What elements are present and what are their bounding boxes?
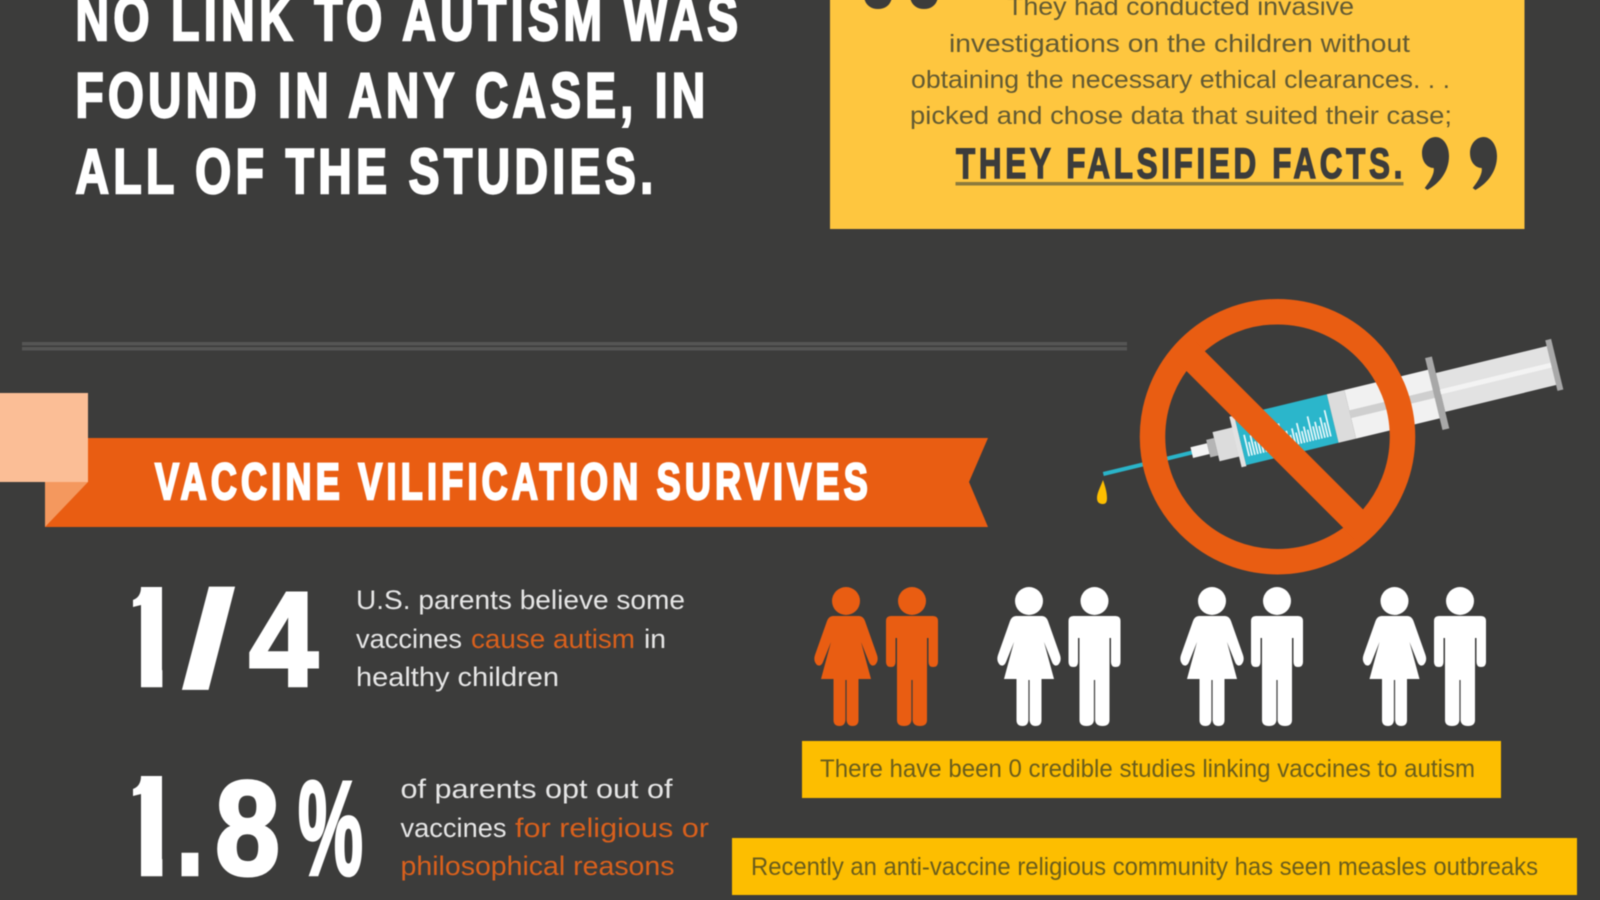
couple 3 (1180, 587, 1303, 726)
description (400, 774, 709, 881)
callout: zero credible studies: There have been 0 credible studies linking vaccines to autism (820, 755, 1475, 783)
quote text: investigations on the children without (949, 30, 1410, 58)
quote text: obtaining the necessary ethical clearances. . . (911, 66, 1450, 94)
icon: closing quotation marks (1422, 137, 1497, 190)
big number: 1 (139, 754, 163, 900)
callout: zero credible studies (802, 741, 1501, 798)
syringe (1095, 328, 1566, 510)
callout: measles outbreaks: Recently an anti-vaccine religious community has seen measles outbreaks (751, 853, 1538, 881)
banner: vaccine vilification survives: VACCINE VILIFICATION SURVIVES (155, 453, 872, 510)
big number: 8 (215, 754, 280, 900)
big number: / (183, 566, 234, 714)
stat: 1.8 percent (133, 754, 709, 900)
heading: no link to autism (76, 0, 742, 207)
couple 2 (997, 587, 1120, 726)
banner: vaccine vilification survives (0, 393, 988, 527)
description: for religious or (515, 813, 709, 843)
big number: % (298, 754, 363, 900)
description: in (644, 624, 666, 654)
quote punchline: THEY FALSIFIED FACTS. (956, 140, 1406, 188)
quote text: picked and chose data that suited their case; (910, 102, 1452, 130)
panel: quote (830, 0, 1524, 229)
description: of parents opt out of (400, 774, 673, 804)
icon: crossed-out syringe (1095, 312, 1566, 562)
big number (133, 754, 363, 900)
heading: no link to autism: ALL OF THE STUDIES. (76, 137, 658, 207)
icon: opening quotation marks (864, 0, 938, 9)
quote text (910, 0, 1452, 130)
big number: . (176, 754, 204, 900)
icon: yellow drop (1097, 480, 1107, 504)
big number: 4 (249, 566, 318, 714)
description: philosophical reasons (400, 851, 674, 881)
description: healthy children (356, 662, 559, 692)
description: cause autism (471, 624, 635, 654)
no symbol (1152, 312, 1402, 562)
couple highlighted (814, 587, 938, 726)
stat: one in four (133, 566, 685, 714)
big number: 1 (139, 566, 163, 714)
description: vaccines (356, 624, 462, 654)
divider (22, 342, 1127, 350)
heading: no link to autism: FOUND IN ANY CASE, IN (76, 61, 710, 131)
description: U.S. parents believe some (356, 585, 685, 615)
pictogram: four couples, one highlighted (814, 587, 1486, 726)
big number (133, 566, 318, 714)
description: vaccines (400, 813, 506, 843)
description (356, 585, 685, 692)
couple 4 (1363, 587, 1486, 726)
callout: measles outbreaks (732, 838, 1577, 895)
